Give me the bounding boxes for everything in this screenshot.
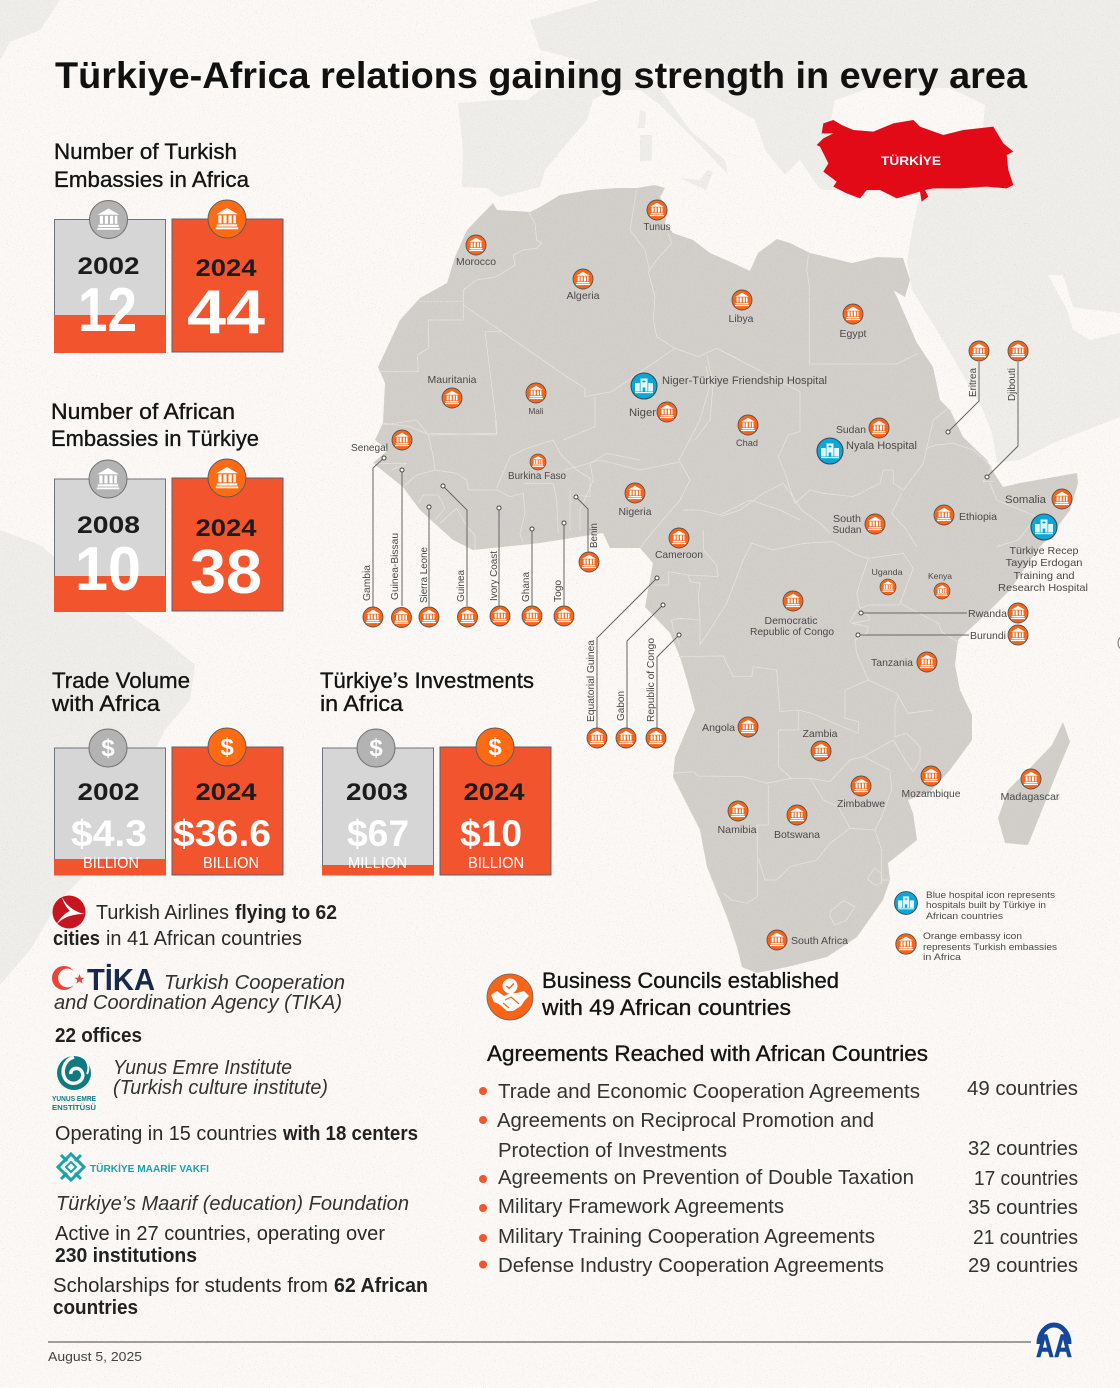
- map labels: Research Hospital: [998, 582, 1088, 594]
- panel: trade 2002: $4.3: [71, 813, 147, 854]
- heading: trade volume: Trade Volume: [52, 668, 190, 693]
- text: TIKA: and Coordination Agency (TIKA): [54, 992, 342, 1014]
- text: Turkish Airlines: flying to 62: [235, 902, 337, 924]
- map labels: Nigeria: [618, 506, 652, 518]
- list: agreements: 35 countries: [968, 1197, 1078, 1219]
- text: Maarif: 230 institutions: [55, 1245, 197, 1267]
- map labels: Türkiye Recep: [1010, 545, 1079, 557]
- map labels: Kenya: [928, 571, 952, 581]
- panel: trade 2002: $: [101, 735, 115, 762]
- heading: Turkish embassies: [54, 139, 250, 192]
- map labels: Tanzania: [871, 657, 913, 669]
- panel: trade 2024: BILLION: [203, 855, 259, 872]
- map labels: Republic of Congo: [750, 626, 834, 638]
- title: Türkiye-Africa relations gaining strength in every area: [55, 55, 1027, 96]
- panel: trade 2024: 2024: [196, 779, 257, 806]
- panel: African embassies 2024: 2024: [196, 515, 257, 542]
- heading: trade volume: [51, 668, 190, 716]
- legend: African countries: [926, 911, 1003, 922]
- text: scholarships: countries: [53, 1297, 138, 1319]
- map labels: Djibouti: [1006, 368, 1018, 401]
- heading: business councils: [541, 968, 839, 1020]
- map labels: Ethiopia: [959, 511, 997, 523]
- map labels: Sierra Leone: [418, 547, 430, 603]
- text: Maarif: [55, 1193, 409, 1267]
- map: Türkiye: TÜRKİYE: [881, 153, 941, 168]
- map labels: Namibia: [718, 824, 757, 836]
- map labels: Ivory Coast: [488, 551, 500, 601]
- date: August 5, 2025: [48, 1350, 142, 1364]
- panel: trade 2002: [54, 729, 166, 876]
- panel: investments 2003: [322, 729, 434, 876]
- panel: African embassies 2008: [54, 460, 166, 612]
- map labels: Niger-Türkiye Friendship Hospital: [662, 375, 827, 387]
- map labels: Guinea-Bissau: [389, 533, 401, 600]
- panel: investments 2024: $10: [460, 813, 522, 854]
- text: Yunus Emre: with 18 centers: [282, 1123, 418, 1145]
- text: Turkish Airlines: Turkish Airlines: [96, 902, 229, 924]
- map labels: Zambia: [802, 728, 838, 740]
- text: Yunus Emre: Operating in 15 countries: [55, 1123, 277, 1145]
- list: agreements: Trade and Economic Cooperation Agreements: [498, 1081, 920, 1103]
- text: scholarships: [53, 1275, 428, 1319]
- borders west: [373, 420, 640, 550]
- text: TIKA: 22 offices: [55, 1025, 142, 1047]
- map labels: Sudan: [832, 524, 862, 536]
- list: agreements: 21 countries: [973, 1227, 1078, 1249]
- panel: African embassies 2008: 10: [75, 535, 141, 604]
- text: Turkish Airlines: cities: [53, 928, 100, 950]
- map labels: Gabon: [615, 691, 627, 721]
- map labels: Benin: [588, 523, 600, 548]
- map labels: Mali: [528, 406, 544, 416]
- text: Yunus Emre: (Turkish culture institute): [113, 1077, 328, 1099]
- map labels: Madagascar: [1000, 791, 1060, 803]
- map labels: Niger: [629, 407, 656, 419]
- legend: hospitals built by Türkiye in: [926, 900, 1046, 911]
- heading: agreements: Agreements Reached with African Countries: [487, 1041, 928, 1066]
- legend: represents Turkish embassies: [923, 942, 1057, 953]
- list: agreements: 29 countries: [968, 1255, 1078, 1277]
- map labels: Zimbabwe: [837, 798, 885, 810]
- logo: AA: AA: [1036, 1328, 1072, 1364]
- map: Africa: [373, 185, 1078, 973]
- list: agreements: 32 countries: [968, 1138, 1078, 1160]
- embassy markers: [363, 200, 1072, 950]
- list: agreements: Military Framework Agreements: [498, 1196, 784, 1218]
- text: Yunus Emre: [55, 1057, 418, 1145]
- map labels: Guinea: [455, 570, 467, 602]
- panel: Turkish embassies 2002: 2002: [78, 253, 140, 280]
- map labels: Eritrea: [967, 368, 979, 397]
- panel: investments 2024: [440, 728, 551, 875]
- logo: Yunus Emre: ENSTİTÜSÜ: [52, 1103, 96, 1112]
- map labels: Chad: [736, 438, 758, 448]
- map labels: Training and: [1014, 570, 1075, 582]
- map labels: Mauritania: [428, 374, 477, 386]
- panel: investments 2003: MILLION: [348, 855, 407, 872]
- icon: handshake: [487, 974, 533, 1020]
- map labels: Ghana: [520, 572, 532, 602]
- borders south: [655, 530, 960, 925]
- map labels: Gambia: [361, 565, 373, 601]
- text: Maarif: Türkiye’s Maarif (education) Foundation: [56, 1193, 409, 1215]
- panel: investments 2003: $: [369, 735, 383, 762]
- text: Maarif: Active in 27 countries, operating over: [55, 1223, 385, 1245]
- map labels: Somalia: [1005, 494, 1047, 506]
- map labels: Cameroon: [655, 549, 703, 561]
- map labels: Tayyip Erdogan: [1006, 557, 1083, 569]
- panel: trade 2024: $: [220, 734, 234, 761]
- map labels: Mozambique: [902, 788, 961, 800]
- panel: investments 2024: BILLION: [468, 855, 524, 872]
- panel: Turkish embassies 2024: [172, 200, 283, 352]
- map labels: Togo: [552, 580, 564, 602]
- borders north-east: [720, 255, 1037, 547]
- map labels: Sudan: [836, 424, 866, 436]
- text: TIKA: [54, 972, 345, 1047]
- text: Turkish Airlines: [53, 902, 337, 950]
- icon: Turkish Airlines: [52, 896, 86, 928]
- heading: trade volume: with Africa: [51, 691, 161, 716]
- heading: African embassies: [51, 399, 259, 451]
- logo: Maarif: TÜRKİYE MAARİF VAKFI: [90, 1162, 209, 1175]
- hospital markers: [631, 373, 1057, 540]
- panel: African embassies 2024: 38: [190, 538, 262, 607]
- text: Turkish Airlines: in 41 African countries: [106, 928, 302, 950]
- list: agreements: Defense Industry Cooperation Agreements: [498, 1255, 884, 1277]
- list: agreements: Agreements on Reciprocal Promotion and: [497, 1110, 874, 1132]
- map labels: Nyala Hospital: [846, 440, 917, 452]
- map labels: South Africa: [791, 935, 848, 947]
- map labels: Algeria: [566, 290, 600, 302]
- text: Yunus Emre: Yunus Emre Institute: [113, 1057, 292, 1079]
- logo: TIKA: TİKA: [87, 962, 155, 997]
- panel: trade 2024: $36.6: [173, 813, 271, 854]
- Madagascar: [998, 722, 1070, 845]
- list: agreements: 49 countries: [967, 1078, 1078, 1100]
- map labels: [351, 221, 1088, 947]
- panel: trade 2024: [172, 728, 283, 875]
- panel: investments 2003: $67: [347, 813, 409, 854]
- panel: trade 2002: BILLION: [83, 855, 139, 872]
- panel: investments 2024: 2024: [464, 779, 525, 806]
- heading: investments: in Africa: [320, 691, 404, 716]
- map labels: South: [833, 513, 861, 525]
- legend: Blue hospital icon represents: [926, 890, 1055, 901]
- text: TIKA: Turkish Cooperation: [164, 972, 345, 994]
- heading: Turkish embassies: Embassies in Africa: [54, 167, 250, 192]
- list: agreements: Military Training Cooperation Agreements: [498, 1226, 875, 1248]
- borders north-west: [378, 190, 740, 440]
- background continents: [0, 0, 1120, 985]
- panel: investments 2003: 2003: [346, 779, 408, 806]
- map labels: Morocco: [456, 256, 496, 268]
- list: agreements: 17 countries: [974, 1168, 1078, 1190]
- heading: investments: Türkiye’s Investments: [320, 668, 534, 693]
- heading: African embassies: Embassies in Türkiye: [51, 426, 259, 451]
- list: agreements: Protection of Investments: [498, 1140, 727, 1162]
- panel: trade 2002: 2002: [78, 779, 140, 806]
- map labels: Egypt: [840, 328, 867, 340]
- borders centre: [565, 366, 800, 548]
- list: agreements: Agreements on Prevention of Double Taxation: [498, 1167, 914, 1189]
- map: Türkiye: [817, 120, 1013, 202]
- map labels: Equatorial Guinea: [585, 640, 597, 722]
- legend: in Africa: [923, 952, 962, 963]
- leader lines: [373, 362, 1018, 728]
- legend: Orange embassy icon: [923, 931, 1022, 942]
- panel: Turkish embassies 2002: [54, 200, 166, 353]
- legend: [895, 890, 1057, 963]
- map labels: Burundi: [970, 630, 1006, 642]
- mainland Africa: [373, 185, 1078, 973]
- logo: Maarif: [58, 1154, 209, 1180]
- panel: African embassies 2008: 2008: [77, 512, 140, 539]
- map labels: Libya: [728, 313, 754, 325]
- text: scholarships: Scholarships for students from: [53, 1275, 328, 1297]
- list: agreements: [479, 1078, 1078, 1277]
- small offshore marker: [1118, 635, 1120, 651]
- map labels: Democratic: [764, 615, 818, 627]
- seas over background continents: [730, 88, 1120, 340]
- map labels: Botswana: [774, 829, 820, 841]
- map labels: Senegal: [351, 442, 388, 454]
- heading: Turkish embassies: Number of Turkish: [54, 139, 237, 164]
- panel: African embassies 2024: [172, 459, 283, 611]
- panel: Turkish embassies 2002: 12: [78, 276, 137, 345]
- panel: investments 2024: $: [488, 734, 502, 761]
- heading: African embassies: Number of African: [51, 399, 235, 424]
- map labels: Tunus: [644, 221, 670, 233]
- logo: Yunus Emre: YUNUS EMRE: [52, 1094, 96, 1103]
- panel: Turkish embassies 2024: 44: [187, 278, 266, 347]
- heading: business councils: with 49 African countries: [541, 995, 791, 1020]
- footer rule: [48, 1342, 1031, 1343]
- heading: investments: [320, 668, 534, 716]
- map labels: Angola: [702, 722, 735, 734]
- text: scholarships: 62 African: [334, 1275, 428, 1297]
- logo: TIKA: [52, 962, 155, 997]
- logo: Yunus Emre: [52, 1056, 96, 1112]
- map labels: Uganda: [872, 567, 903, 577]
- heading: business councils: Business Councils established: [542, 968, 839, 993]
- map labels: Rwanda: [968, 608, 1007, 620]
- panel: Turkish embassies 2024: 2024: [196, 255, 257, 282]
- map labels: Republic of Congo: [645, 638, 657, 722]
- map labels: Burkina Faso: [508, 470, 566, 482]
